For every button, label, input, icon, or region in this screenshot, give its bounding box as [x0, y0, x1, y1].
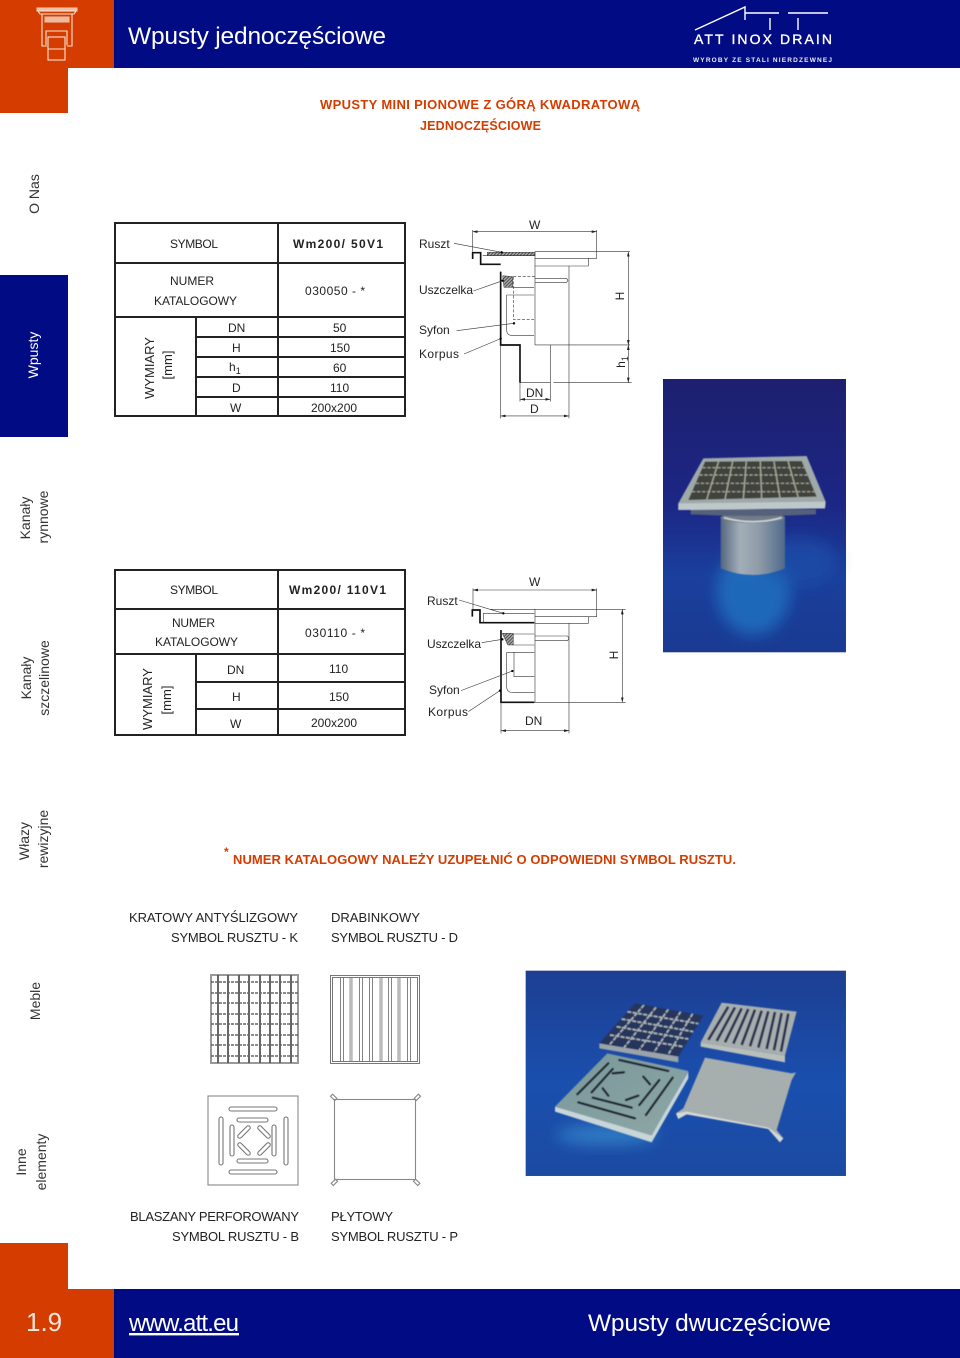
side nav: Inne elementy: elementy	[33, 1134, 49, 1190]
side nav: Kanały rynnowe	[17, 490, 51, 543]
icon: drain	[37, 8, 77, 60]
diagram: section of Wm200/110V1: Uszczelka	[427, 637, 481, 651]
heading	[320, 97, 641, 133]
next section title: Wpusty dwuczęściowe	[588, 1310, 831, 1337]
side nav: Kanały rynnowe: Kanały	[17, 497, 33, 539]
table: Wm200/110V1: W	[230, 717, 242, 731]
diagram: section of Wm200/110V1: H	[607, 651, 621, 659]
footnote: *	[224, 845, 229, 859]
side nav: Włazy rewizyjne: rewizyjne	[35, 810, 51, 868]
diagram: section of Wm200/50V1: Korpus	[419, 347, 459, 361]
drawing: anti-slip mesh grate	[211, 975, 298, 1063]
footnote	[224, 845, 736, 867]
table: Wm200/110V1: H	[232, 690, 241, 704]
label: grate K: KRATOWY ANTYŚLIZGOWY	[129, 910, 298, 925]
table: Wm200/50V1: 150	[330, 341, 350, 355]
table: Wm200/50V1: 200x200	[311, 401, 357, 415]
diagram: section of Wm200/110V1: Syfon	[429, 683, 460, 697]
diagram: section of Wm200/50V1: DN	[526, 386, 543, 400]
side nav: Wpusty: Wpusty	[25, 332, 41, 378]
table: Wm200/110V1: SYMBOL	[170, 583, 218, 597]
side nav: Kanały rynnowe: rynnowe	[35, 490, 51, 543]
table: Wm200/50V1: 50	[333, 321, 347, 335]
footnote: NUMER KATALOGOWY NALEŻY UZUPEŁNIĆ O ODPOWIEDNI SYMBOL RUSZTU.	[233, 852, 736, 867]
logo	[693, 7, 832, 64]
diagram: section of Wm200/50V1: H	[613, 292, 627, 300]
table: Wm200/50V1: W	[230, 401, 242, 415]
table: Wm200/110V1: KATALOGOWY	[155, 635, 238, 649]
side nav: Kanały szczelinowe: Kanały	[18, 657, 34, 699]
table: Wm200/50V1: H	[232, 341, 241, 355]
diagram: section of Wm200/110V1: DN	[525, 714, 542, 728]
table: Wm200/110V1: NUMER	[172, 616, 215, 630]
website link: www.att.eu	[128, 1310, 239, 1337]
table: Wm200/50V1: Wm200/ 50V1	[293, 237, 383, 251]
table: Wm200/110V1: WYMIARY	[140, 668, 155, 730]
table: Wm200/50V1: DN	[228, 321, 245, 335]
side nav: active Wpusty background	[0, 275, 68, 437]
side nav: Włazy rewizyjne	[16, 810, 51, 868]
diagram: section of Wm200/50V1: Ruszt	[419, 237, 450, 251]
label: grate P: SYMBOL RUSZTU - P	[331, 1229, 458, 1244]
label: grate D: SYMBOL RUSZTU - D	[331, 930, 458, 945]
header orange tab	[0, 0, 114, 113]
label: grate D	[331, 910, 458, 945]
header bar	[114, 0, 960, 68]
table: Wm200/110V1: [mm]	[159, 686, 174, 714]
drawing: solid plate grate	[330, 1094, 421, 1186]
label: grate B: BLASZANY PERFOROWANY	[130, 1209, 299, 1224]
diagram: section of Wm200/50V1: 1	[620, 356, 630, 361]
label: grate P: PŁYTOWY	[331, 1209, 393, 1224]
side nav: Kanały szczelinowe	[18, 640, 52, 716]
page number: 1.9	[26, 1307, 62, 1337]
table: Wm200/50V1: h	[229, 360, 236, 374]
table: Wm200/50V1: [mm]	[160, 351, 175, 379]
label: grate K	[129, 910, 298, 945]
table: Wm200/50V1	[115, 223, 405, 416]
photo: four grate types	[526, 971, 846, 1176]
side nav: O Nas: O Nas	[26, 174, 42, 214]
table: Wm200/110V1: Wm200/ 110V1	[289, 583, 386, 597]
side nav: Włazy rewizyjne: Włazy	[16, 822, 32, 860]
label: grate K: SYMBOL RUSZTU - K	[171, 930, 298, 945]
diagram: section of Wm200/50V1: h	[614, 361, 628, 368]
side nav: Inne elementy	[13, 1134, 49, 1190]
diagram: section of Wm200/50V1: Uszczelka	[419, 283, 473, 297]
table: Wm200/50V1: 1	[236, 366, 241, 376]
footer orange tab	[0, 1243, 114, 1358]
diagram: section of Wm200/50V1	[419, 218, 632, 418]
heading: WPUSTY MINI PIONOWE Z GÓRĄ KWADRATOWĄ	[320, 97, 641, 112]
photo: drain product	[663, 379, 846, 652]
table: Wm200/50V1: 60	[333, 361, 347, 375]
diagram: section of Wm200/50V1: Syfon	[419, 323, 450, 337]
diagram: section of Wm200/110V1	[427, 575, 626, 733]
side nav: Inne elementy: Inne	[13, 1148, 29, 1176]
table: Wm200/50V1: SYMBOL	[170, 237, 218, 251]
table: Wm200/50V1: KATALOGOWY	[154, 294, 237, 308]
table: Wm200/110V1	[115, 570, 405, 735]
table: Wm200/110V1: 150	[329, 690, 349, 704]
page title: Wpusty jednoczęściowe	[128, 23, 386, 50]
logo: WYROBY ZE STALI NIERDZEWNEJ	[693, 57, 832, 64]
table: Wm200/110V1: 030110 - *	[305, 626, 365, 640]
table: Wm200/50V1: 110	[330, 381, 349, 395]
table: Wm200/50V1: D	[232, 381, 241, 395]
footer bar	[114, 1289, 960, 1358]
diagram: section of Wm200/50V1: W	[529, 218, 541, 232]
label: grate B	[130, 1209, 299, 1244]
diagram: section of Wm200/110V1: Korpus	[428, 705, 468, 719]
table: Wm200/50V1: NUMER	[170, 274, 214, 288]
table: Wm200/110V1: 110	[329, 662, 348, 676]
label: grate P	[331, 1209, 458, 1244]
table: Wm200/110V1: 200x200	[311, 716, 357, 730]
side nav: Meble: Meble	[27, 982, 43, 1020]
side nav: Kanały szczelinowe: szczelinowe	[36, 640, 52, 716]
diagram: section of Wm200/50V1: D	[530, 402, 539, 416]
drawing: perforated grate	[208, 1096, 298, 1185]
table: Wm200/50V1: WYMIARY	[142, 337, 157, 399]
diagram: section of Wm200/110V1: W	[529, 575, 541, 589]
diagram: section of Wm200/110V1: Ruszt	[427, 594, 458, 608]
heading: JEDNOCZĘŚCIOWE	[420, 118, 541, 133]
logo: ATT INOX DRAIN	[694, 31, 832, 47]
label: grate D: DRABINKOWY	[331, 910, 420, 925]
table: Wm200/50V1: 030050 - *	[305, 284, 365, 298]
table: Wm200/110V1: DN	[227, 663, 244, 677]
drawing: ladder grate	[330, 976, 420, 1064]
label: grate B: SYMBOL RUSZTU - B	[172, 1229, 299, 1244]
